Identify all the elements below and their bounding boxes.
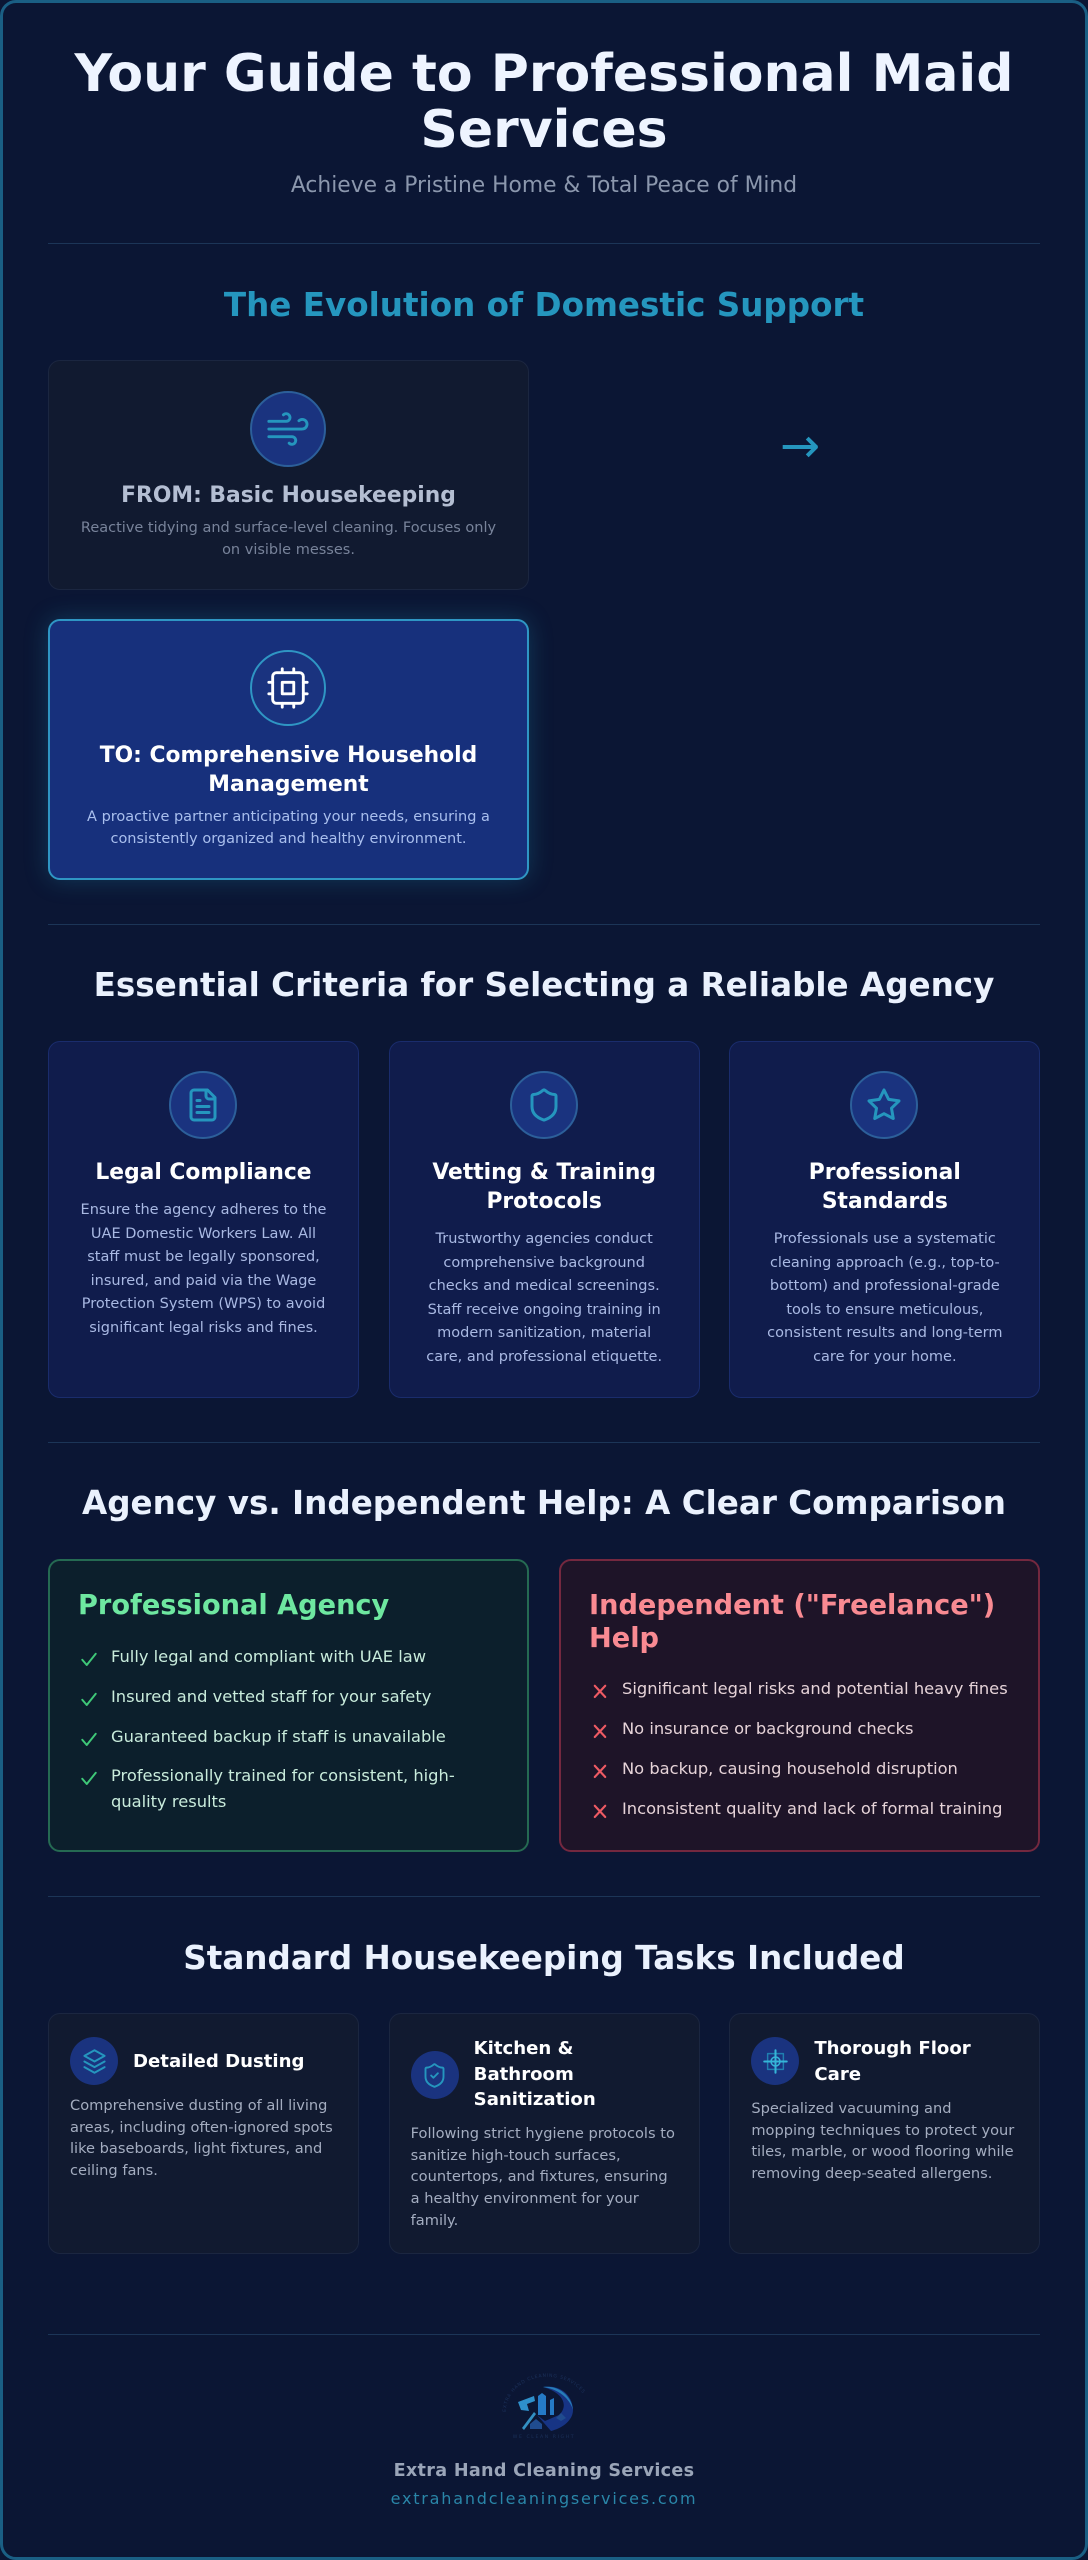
panel: professional agency: Guaranteed backup if staff is unavailable <box>111 1727 446 1746</box>
panel: legal compliance <box>48 1041 359 1398</box>
vetting description: Staff receive ongoing training in <box>428 1302 661 1318</box>
dusting description <box>70 2097 333 2179</box>
to heading <box>100 743 477 797</box>
vetting heading: Vetting & Training <box>432 1160 656 1185</box>
panel: independent help <box>559 1559 1040 1852</box>
standards description: bottom) and professional-grade <box>770 1278 1000 1294</box>
legal description: significant legal risks and fines. <box>89 1320 318 1336</box>
from description <box>81 520 496 558</box>
from description: Reactive tidying and surface-level cleaning. Focuses only <box>81 520 496 536</box>
agency item 1 <box>81 1647 426 1666</box>
panel: to comprehensive household management <box>48 619 529 880</box>
icon: layers <box>70 2037 118 2085</box>
vetting heading: Protocols <box>486 1189 602 1214</box>
panel: professional standards <box>729 1041 1040 1398</box>
heading: tasks: Standard Housekeeping Tasks Included <box>183 1939 905 1977</box>
floor description: Specialized vacuuming and <box>751 2100 952 2117</box>
independent item 4 <box>594 1799 1002 1818</box>
panel: independent help: No backup, causing household disruption <box>622 1759 958 1778</box>
standards description: tools to ensure meticulous, <box>786 1302 983 1318</box>
independent heading: Independent ("Freelance") <box>589 1590 995 1621</box>
title: Your Guide to Professional Maid <box>75 44 1013 104</box>
kitchen heading: Sanitization <box>474 2089 596 2110</box>
to heading: Management <box>208 772 369 797</box>
kitchen description: sanitize high-touch surfaces, <box>411 2147 621 2164</box>
from heading: FROM: Basic Housekeeping <box>121 483 456 508</box>
to description <box>87 809 490 847</box>
subtitle: Achieve a Pristine Home & Total Peace of Mind <box>291 173 797 198</box>
legal heading: Legal Compliance <box>95 1160 312 1185</box>
standards description: cleaning approach (e.g., top-to- <box>770 1255 1000 1271</box>
kitchen description: countertops, and fixtures, ensuring <box>411 2168 668 2185</box>
standards heading: Standards <box>822 1189 948 1214</box>
agency heading: Professional Agency <box>78 1590 389 1621</box>
icon: shield <box>510 1071 578 1139</box>
panel: professional agency: Fully legal and compliant with UAE law <box>111 1647 426 1666</box>
floor description: removing deep-seated allergens. <box>751 2165 992 2182</box>
standards heading <box>809 1160 961 1214</box>
kitchen description: Following strict hygiene protocols to <box>411 2125 675 2142</box>
panel: kitchen and bathroom <box>389 2013 700 2254</box>
panel: professional agency <box>48 1559 529 1852</box>
legal description: Protection System (WPS) to avoid <box>82 1296 325 1312</box>
agency item 2 <box>81 1687 431 1706</box>
dusting heading: Detailed Dusting <box>133 2051 304 2072</box>
floor heading: Thorough Floor <box>814 2038 971 2059</box>
independent item 2 <box>594 1719 914 1738</box>
vetting description <box>426 1231 662 1365</box>
icon: floor grid <box>751 2037 799 2085</box>
to heading: TO: Comprehensive Household <box>100 743 477 768</box>
independent item 1 <box>594 1679 1008 1698</box>
kitchen description <box>410 2125 675 2229</box>
kitchen heading <box>474 2038 596 2110</box>
vetting description: comprehensive background <box>443 1255 645 1271</box>
dusting description: areas, including often-ignored spots <box>70 2119 333 2136</box>
title <box>74 44 1013 160</box>
icon: wind <box>250 391 326 467</box>
independent heading <box>589 1590 995 1654</box>
panel: independent help: Inconsistent quality and lack of formal training <box>622 1799 1002 1818</box>
title: Services <box>420 100 668 160</box>
heading: comparison: Agency vs. Independent Help: A Clear Comparison <box>82 1484 1006 1522</box>
to description: consistently organized and healthy environment. <box>110 831 467 847</box>
vetting description: checks and medical screenings. <box>429 1278 660 1294</box>
agency item 4 <box>81 1766 455 1811</box>
vetting description: care, and professional etiquette. <box>426 1349 662 1365</box>
icon: star <box>850 1071 918 1139</box>
standards heading: Professional <box>809 1160 961 1185</box>
icon: shield check <box>411 2051 459 2099</box>
standards description: care for your home. <box>813 1349 957 1365</box>
standards description <box>767 1231 1002 1365</box>
icon: cpu <box>250 650 326 726</box>
panel: professional agency: quality results <box>111 1792 226 1811</box>
to description: A proactive partner anticipating your needs, ensuring a <box>87 809 490 825</box>
kitchen heading: Bathroom <box>474 2064 574 2085</box>
panel: floor care <box>729 2013 1040 2254</box>
arrow: → <box>780 418 820 474</box>
floor description: mopping techniques to protect your <box>751 2122 1014 2139</box>
heading: evolution: The Evolution of Domestic Support <box>224 286 864 324</box>
panel: vetting and training <box>389 1041 700 1398</box>
vetting description: Trustworthy agencies conduct <box>436 1231 653 1247</box>
floor description <box>751 2100 1014 2182</box>
heading: criteria: Essential Criteria for Selecting a Reliable Agency <box>94 966 994 1004</box>
company name: Extra Hand Cleaning Services <box>394 2461 694 2481</box>
legal description: insured, and paid via the Wage <box>91 1273 316 1289</box>
vetting description: modern sanitization, material <box>437 1325 651 1341</box>
legal description <box>81 1202 326 1336</box>
panel: independent help: No insurance or background checks <box>622 1719 914 1738</box>
legal description: staff must be legally sponsored, <box>87 1249 320 1265</box>
legal description: Ensure the agency adheres to the <box>81 1202 326 1218</box>
floor heading: Care <box>814 2064 861 2085</box>
floor heading <box>814 2038 971 2085</box>
panel: detailed dusting <box>48 2013 359 2254</box>
floor description: tiles, marble, or wood flooring while <box>751 2143 1014 2160</box>
agency item 3 <box>81 1727 446 1746</box>
independent heading: Help <box>589 1623 659 1654</box>
standards description: Professionals use a systematic <box>774 1231 996 1247</box>
dusting description: like baseboards, light fixtures, and <box>70 2140 322 2157</box>
panel: from basic housekeeping <box>48 360 529 590</box>
vetting heading <box>432 1160 656 1214</box>
logo: EXTRA HAND CLEANING SERVICES <box>502 2374 585 2412</box>
kitchen description: a healthy environment for your <box>411 2190 639 2207</box>
logo: WE CLEAN RIGHT <box>513 2434 575 2440</box>
from description: on visible messes. <box>222 542 355 558</box>
icon: document <box>169 1071 237 1139</box>
independent item 3 <box>594 1759 958 1778</box>
kitchen heading: Kitchen & <box>474 2038 573 2059</box>
panel: professional agency: Insured and vetted staff for your safety <box>111 1687 431 1706</box>
panel: professional agency: Professionally trained for consistent, high- <box>111 1766 455 1785</box>
website url: extrahandcleaningservices.com <box>391 2489 697 2508</box>
dusting description: ceiling fans. <box>70 2162 158 2179</box>
panel: independent help: Significant legal risks and potential heavy fines <box>622 1679 1008 1698</box>
dusting description: Comprehensive dusting of all living <box>70 2097 327 2114</box>
kitchen description: family. <box>411 2212 458 2229</box>
legal description: UAE Domestic Workers Law. All <box>91 1226 316 1242</box>
logo <box>502 2374 585 2440</box>
standards description: consistent results and long-term <box>767 1325 1002 1341</box>
